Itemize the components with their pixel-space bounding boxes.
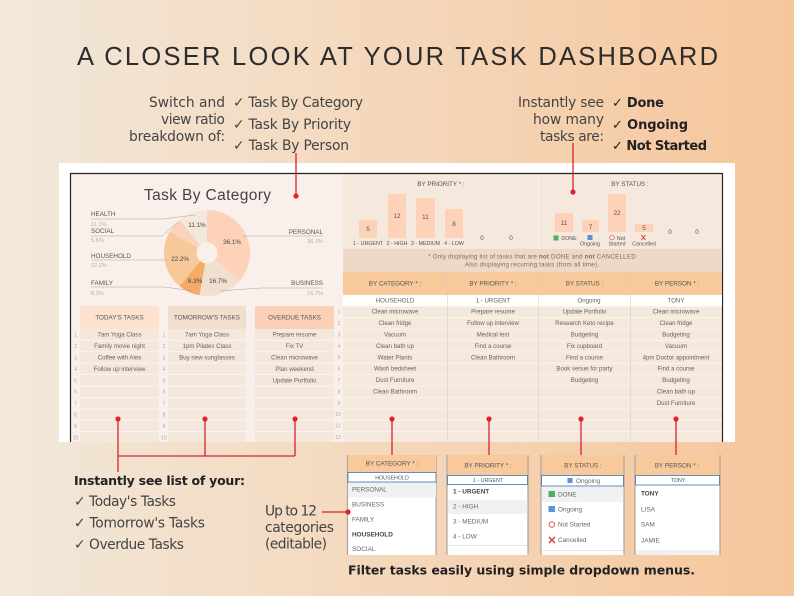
bar chart: by status: BY STATUS :	[611, 181, 649, 188]
panel: today's tasks: Family movie night	[94, 343, 145, 350]
bar chart: by status: Cancelled	[632, 242, 656, 248]
text block: task lists checklist: ✓ Today's Tasks	[74, 494, 176, 510]
dropdown: by person: LISA	[641, 506, 656, 514]
table: filtered task lists: Dust Furniture	[376, 377, 415, 384]
table: filtered task lists: Find a course	[566, 354, 604, 361]
table: filtered task lists: Clean Bathroom	[373, 388, 417, 396]
text block: ratio breakdown intro	[129, 95, 225, 145]
table: filtered task lists: 4pm Doctor appointment	[643, 354, 710, 361]
pie chart labels and leader lines: 5.6%	[91, 238, 104, 244]
table: filtered task lists: Fix cupboard	[567, 343, 602, 350]
table: filtered task lists: 1 - URGENT	[476, 298, 511, 304]
table: filtered task lists: Find a course	[658, 366, 695, 373]
bar chart: by priority: 4 - LOW	[444, 241, 464, 247]
checklist: task statuses: ✓ Ongoing	[612, 118, 688, 133]
panel: tomorrow's tasks: 6	[163, 390, 166, 396]
checklist: ratio options: ✓ Task By Person	[233, 138, 349, 154]
table: filtered task lists: Budgeting	[571, 332, 598, 338]
panel: today's tasks: 3	[74, 356, 77, 362]
row numbers: right table: 5	[338, 355, 341, 361]
dropdown: by status: Ongoing	[558, 506, 583, 514]
bar chart: by priority: 11	[422, 214, 429, 221]
panel: tomorrow's tasks: 7am Yoga Class	[185, 332, 229, 339]
title: A CLOSER LOOK AT YOUR TASK DASHBOARD	[77, 43, 718, 71]
table: filtered task lists: BY STATUS :	[566, 280, 603, 288]
panel: tomorrow's tasks: 2	[163, 344, 166, 350]
bar chart: by status: Ongoing	[580, 242, 600, 248]
caption: dropdown filters: Filter tasks easily using simple dropdown menus.	[348, 562, 695, 578]
panel: overdue tasks	[255, 306, 334, 442]
arrows: red pointer lines	[115, 143, 679, 515]
panel: overdue tasks: Plan weekend	[275, 366, 314, 373]
bar chart: by priority: 1 - URGENT	[353, 241, 384, 247]
panel: today's tasks: 1	[74, 333, 77, 339]
bar chart: by priority: 3 - MEDIUM	[411, 241, 440, 247]
dropdown: by status: BY STATUS :	[564, 462, 602, 470]
table: filtered task lists: Research Keto recipe	[555, 320, 614, 327]
dropdown: by priority: BY PRIORITY * :	[464, 462, 512, 470]
panel: tomorrow's tasks: 3	[163, 356, 166, 362]
bar chart: by priority: 8	[452, 221, 456, 228]
panel: tomorrow's tasks	[161, 306, 246, 442]
panel: tomorrow's tasks: 1	[163, 333, 166, 339]
note band: * Only displaying list of tasks that are not DONE and not CANCELLED	[428, 254, 636, 260]
table: filtered task lists: Wash bedsheet	[374, 366, 416, 373]
dropdown: by category: HOUSEHOLD	[352, 532, 393, 538]
panel: today's tasks: 4	[74, 367, 77, 373]
bar chart: by status: DONE	[561, 236, 577, 242]
callout: editable categories: categories	[265, 520, 334, 536]
dropdown: by priority: 2 - HIGH	[453, 504, 479, 510]
row numbers: right table: 12	[335, 435, 341, 441]
panel: today's tasks	[73, 306, 159, 442]
row numbers: right table	[335, 310, 341, 441]
bar chart: by priority: 5	[366, 226, 370, 233]
dropdown: by person: TONY	[641, 490, 659, 498]
dropdown: by status	[541, 455, 624, 555]
checklist: task statuses: ✓ Not Started	[612, 139, 707, 154]
dropdown: by category: PERSONAL	[352, 486, 387, 494]
table: filtered task lists: Prepare resume	[471, 309, 515, 316]
note band: Also displaying recurring tasks (from all time).	[465, 262, 599, 268]
panel: today's tasks: 7am Yoga Class	[97, 332, 142, 339]
bar chart: by status: Started	[608, 242, 626, 248]
dropdown: by status: Ongoing	[576, 478, 601, 485]
dropdown: by person: SAM	[641, 522, 655, 528]
table: filtered task lists: Book venue for party	[556, 366, 614, 373]
dropdown: by category: BUSINESS	[352, 502, 384, 508]
dropdown: by person: TONY	[671, 478, 686, 484]
text block: task lists checklist: ✓ Tomorrow's Tasks	[74, 516, 205, 532]
pie chart labels and leader lines: HEALTH	[91, 211, 116, 218]
pie chart labels and leader lines: SOCIAL	[91, 228, 115, 235]
row numbers: right table: 4	[338, 344, 341, 350]
panel: today's tasks: 8	[74, 412, 77, 418]
callout: editable categories: Up to 12	[265, 504, 317, 520]
panel: tomorrow's tasks: 5	[163, 378, 166, 384]
pie chart: task by category: 8.3%	[188, 278, 203, 285]
panel: today's tasks: 6	[74, 390, 77, 396]
chart heading: Task By Category: Task By Category	[144, 187, 271, 204]
dropdown: by category: SOCIAL	[352, 546, 376, 553]
dropdown: by status: Cancelled	[558, 537, 587, 544]
table: filtered task lists: Budgeting	[662, 332, 690, 338]
pie chart: task by category: 36.1%	[223, 239, 241, 246]
dropdown: by category: BY CATEGORY * :	[366, 460, 418, 468]
dashboard screenshot	[59, 163, 735, 442]
table: filtered task lists: Medical test	[477, 332, 510, 338]
panel: today's tasks: TODAY'S TASKS	[95, 314, 144, 322]
dropdown: by category: HOUSEHOLD	[375, 476, 409, 482]
checklist: ratio options	[233, 95, 363, 154]
table: filtered task lists: BY CATEGORY * :	[369, 280, 421, 288]
table: filtered task lists: BY PERSON * :	[655, 280, 699, 288]
row numbers: right table: 3	[338, 332, 341, 338]
table: filtered task lists: Dust Furniture	[657, 400, 696, 407]
checklist: task statuses: ✓ Done	[612, 96, 664, 111]
row numbers: right table: 6	[338, 367, 341, 373]
panel: overdue tasks: Update Portfolio	[273, 377, 317, 384]
table: filtered task lists: Follow up interview	[467, 320, 520, 327]
dropdown: by priority: 1 - URGENT	[453, 488, 489, 496]
dropdown: by category	[348, 455, 436, 555]
panel: tomorrow's tasks: 10	[161, 435, 167, 441]
table: filtered task lists: BY PRIORITY * :	[469, 280, 517, 288]
dropdown: by person: JAMIE	[641, 538, 660, 544]
table: filtered task lists: Clean microwave	[653, 309, 700, 316]
text block: task status intro	[518, 95, 604, 145]
bar chart: by priority: 12	[393, 213, 401, 220]
table: filtered task lists: Clean microwave	[372, 309, 419, 316]
bar chart: by priority	[353, 181, 513, 247]
bar chart: by status: 11	[561, 220, 568, 227]
table: filtered task lists: TONY	[668, 298, 684, 304]
row numbers: right table: 7	[338, 378, 341, 384]
dropdown: by person	[635, 455, 720, 555]
bar chart: by status: 0	[668, 229, 672, 236]
panel: tomorrow's tasks: Buy new sunglasses	[179, 354, 235, 362]
panel: overdue tasks: OVERDUE TASKS	[268, 314, 321, 322]
pie chart labels and leader lines	[91, 211, 323, 297]
panel: today's tasks: Follow up interview	[94, 366, 146, 373]
table: filtered task lists: Clean Bathroom	[471, 354, 515, 361]
checklist: ratio options: ✓ Task By Category	[233, 95, 363, 111]
table: filtered task lists: Vacuum	[384, 332, 406, 338]
panel: today's tasks: 2	[74, 344, 77, 350]
table: filtered task lists: Clean bath up	[376, 343, 415, 350]
callout: editable categories	[265, 504, 334, 552]
bar chart: by priority: 0	[509, 235, 513, 242]
checklist: ratio options: ✓ Task By Priority	[233, 117, 351, 133]
text block: task status intro: tasks are:	[540, 129, 604, 145]
dropdown: by status: Not Started	[558, 522, 591, 528]
row numbers: right table: 9	[338, 401, 341, 407]
bar chart: by status: Not	[617, 236, 626, 242]
table: filtered task lists: Update Portfolio	[563, 309, 607, 316]
pie chart labels and leader lines: 36.1%	[307, 239, 323, 245]
checklist: task statuses	[612, 96, 707, 154]
table: filtered task lists: Ongoing	[577, 298, 601, 304]
row numbers: right table: 1	[338, 310, 341, 316]
panel: today's tasks: 10	[73, 435, 78, 441]
dropdown: by priority	[447, 455, 528, 555]
bar chart: by status: 5	[642, 225, 646, 232]
text block: task status intro: how many	[533, 112, 604, 128]
dropdown: by priority: 3 - MEDIUM	[453, 518, 488, 526]
panel: tomorrow's tasks: 7	[163, 401, 166, 407]
bar chart: by priority: 0	[480, 235, 484, 242]
pie chart labels and leader lines: 16.7%	[307, 291, 323, 297]
panel: today's tasks: 5	[74, 378, 77, 384]
pie chart labels and leader lines: PERSONAL	[289, 229, 323, 236]
pie chart labels and leader lines: 8.3%	[91, 291, 104, 297]
bar chart: by status	[538, 174, 699, 249]
pie chart labels and leader lines: 11.1%	[91, 222, 106, 228]
panel: overdue tasks: Clean microwave	[271, 354, 318, 362]
table: filtered task lists: Clean fridge	[660, 320, 693, 327]
dropdown: by status: DONE	[558, 492, 576, 498]
panel: tomorrow's tasks: 9	[163, 424, 166, 430]
table: filtered task lists: HOUSEHOLD	[376, 298, 415, 304]
row numbers: right table: 11	[335, 424, 341, 430]
dropdown: by category: FAMILY	[352, 516, 375, 524]
pie chart: task by category: 22.2%	[171, 256, 189, 263]
pie chart labels and leader lines: BUSINESS	[291, 280, 323, 287]
pie chart: task by category: 11.1%	[188, 222, 206, 229]
panel: tomorrow's tasks: 4	[163, 367, 166, 373]
callout: editable categories: (editable)	[265, 536, 327, 552]
note band	[343, 249, 722, 272]
pie chart labels and leader lines: 22.2%	[91, 263, 107, 269]
panel: today's tasks: Coffee with Alex	[98, 354, 141, 362]
text block: ratio breakdown intro: Switch and	[149, 95, 225, 111]
panel: tomorrow's tasks: TOMORROW'S TASKS	[174, 314, 240, 322]
table: filtered task lists: Water Plants	[378, 354, 412, 361]
pie chart: task by category: 16.7%	[209, 278, 227, 285]
table: filtered task lists: Budgeting	[571, 377, 598, 384]
table: filtered task lists: Find a course	[475, 343, 512, 350]
pie chart: task by category	[164, 210, 250, 296]
text block: task status intro: Instantly see	[518, 95, 604, 111]
table: filtered task lists: Vacuum	[665, 343, 687, 350]
bar chart: by priority: 2 - HIGH	[387, 241, 408, 247]
dropdown: by priority: 4 - LOW	[453, 534, 478, 540]
text block: task lists checklist: ✓ Overdue Tasks	[74, 537, 184, 553]
pie chart labels and leader lines: HOUSEHOLD	[91, 253, 131, 260]
table: filtered task lists: Clean bath up	[657, 388, 696, 396]
row numbers: right table: 10	[335, 412, 341, 418]
bar chart: by priority: BY PRIORITY * :	[417, 181, 465, 188]
table: filtered task lists: Clean fridge	[379, 320, 412, 327]
panel: tomorrow's tasks: 8	[163, 412, 166, 418]
panel: today's tasks: 7	[74, 401, 77, 407]
dropdown: by person: BY PERSON * :	[655, 462, 699, 470]
panel: overdue tasks: Prepare resume	[273, 332, 317, 339]
row numbers: right table: 2	[338, 321, 341, 327]
row numbers: right table: 8	[338, 389, 341, 395]
table: filtered task lists	[343, 272, 722, 441]
panel: today's tasks: 9	[74, 424, 77, 430]
panel: overdue tasks: Fix TV	[286, 343, 304, 350]
panel: tomorrow's tasks: 1pm Pilates Class	[183, 343, 231, 350]
text block: task lists checklist	[74, 473, 245, 553]
pie chart labels and leader lines: FAMILY	[91, 280, 114, 287]
text block: ratio breakdown intro: breakdown of:	[129, 129, 225, 145]
table: filtered task lists: Budgeting	[662, 377, 690, 384]
bar chart: by status: 7	[589, 224, 593, 231]
bar chart: by status: 0	[695, 229, 699, 236]
text block: ratio breakdown intro: view ratio	[161, 112, 225, 128]
bar chart: by status: 22	[613, 210, 621, 217]
dropdown: by priority: 1 - URGENT	[473, 478, 504, 484]
text block: task lists checklist: Instantly see list of your:	[74, 473, 245, 488]
